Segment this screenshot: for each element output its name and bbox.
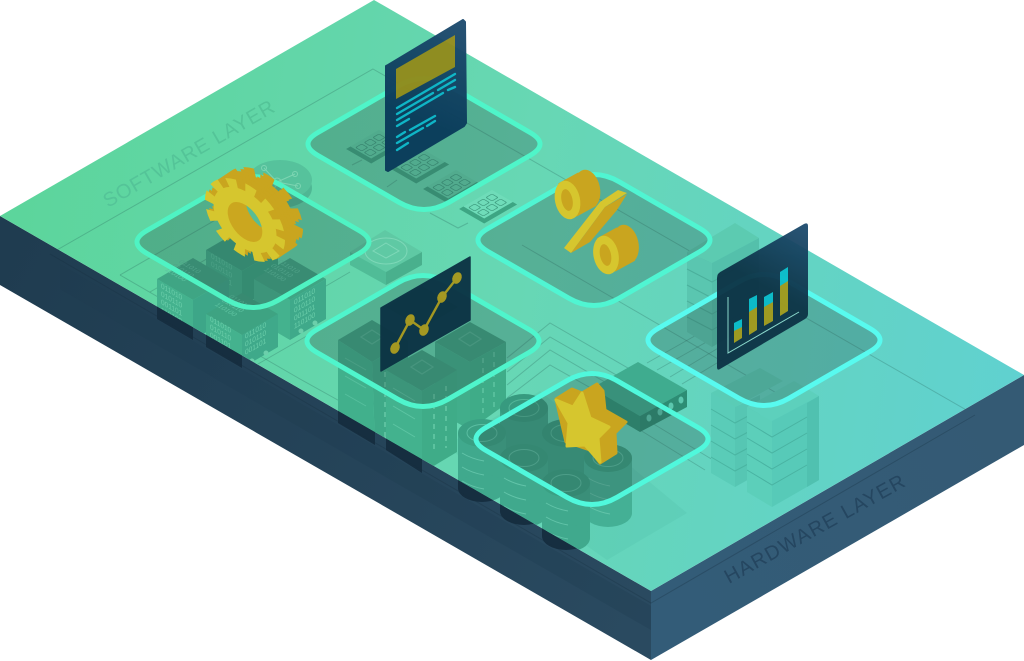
- software layer objects: [248, 130, 517, 285]
- backup folder tile: [350, 230, 422, 285]
- cube: right: 110100: [261, 267, 287, 282]
- icon: percent symbol: [551, 167, 642, 277]
- cube: right: 011010: [294, 286, 315, 307]
- plate: gear: [137, 176, 369, 308]
- cube: left: 001101: [161, 297, 182, 318]
- hardware layer objects: [58, 68, 966, 550]
- bars: [734, 267, 788, 343]
- heading: SOFTWARE LAYER: SOFTWARE LAYER: [100, 96, 279, 212]
- floor tile tint: [445, 391, 687, 560]
- cube: right: 010110: [294, 294, 315, 315]
- chart trend line: [388, 271, 464, 355]
- cube: front: 011010: [210, 314, 231, 335]
- cube: back: 010110: [211, 259, 232, 280]
- percent lower ring: [590, 222, 642, 277]
- plate: star: [476, 374, 708, 504]
- cube: front: [206, 293, 278, 368]
- cube: front: 011010: [226, 294, 252, 309]
- connector box: [592, 362, 687, 432]
- slab side: right blue face: [651, 375, 1024, 660]
- cube: right: 011010: [275, 259, 301, 274]
- server towers under the line chart: [338, 320, 506, 466]
- hardware object undersides showing below the plate edge: [157, 280, 590, 550]
- icon: line chart board: [381, 257, 470, 371]
- tower: front: [385, 350, 457, 473]
- right server tower: upper: [687, 223, 759, 347]
- cube: right: 110100: [294, 310, 315, 331]
- icon: gear: [210, 159, 298, 270]
- percent upper ring: [551, 167, 604, 222]
- disk stack e: [542, 469, 590, 552]
- glowing plates: [137, 78, 880, 504]
- cube: back: [206, 238, 278, 300]
- cube: back: 001101: [211, 267, 232, 288]
- right server tower: front: [747, 381, 819, 507]
- keypad module 3: [423, 170, 481, 204]
- cube: front: 001101: [210, 330, 231, 351]
- plate: percent: [478, 174, 710, 306]
- plate: line chart: [307, 276, 539, 406]
- disk stacks: [458, 394, 632, 552]
- icon: bar chart board: [717, 223, 808, 370]
- plate: bar chart: [648, 274, 880, 406]
- dark band on left face: [60, 264, 651, 630]
- hardware inset line: [50, 254, 975, 603]
- cube: right: 001101: [294, 302, 315, 323]
- cube: front: 110100: [212, 302, 238, 317]
- tower: left: [338, 320, 408, 445]
- connectivity node: [248, 160, 312, 208]
- data storage cubes: [157, 238, 326, 362]
- tower: back: [386, 286, 458, 328]
- cube: front: 010110: [219, 298, 245, 313]
- cube: front: 001101: [245, 336, 266, 357]
- disk stack b: [500, 394, 548, 449]
- cube: left: [157, 258, 229, 340]
- cube: left: 011010: [161, 281, 182, 302]
- disk stack c: [500, 449, 542, 525]
- cube: back: 011010: [211, 251, 232, 272]
- keypad module 1: [346, 130, 404, 164]
- disk stack f: [584, 444, 632, 527]
- keypad module 2: [391, 150, 449, 184]
- icon: star: [556, 384, 626, 463]
- circuit lines: [58, 68, 966, 470]
- cube: left: 010110: [169, 263, 195, 278]
- document image block: [396, 35, 455, 99]
- cube: left: 010110: [161, 289, 182, 310]
- heading: HARDWARE LAYER: HARDWARE LAYER: [721, 471, 909, 588]
- disk stack d: [548, 420, 588, 474]
- cube: right: 010110: [268, 263, 294, 278]
- plate: document: [308, 78, 540, 210]
- percent slash: [564, 190, 627, 253]
- disk stack a: [458, 419, 500, 500]
- cube: left: 110100: [161, 305, 182, 326]
- cube: left: 011010: [176, 259, 202, 274]
- bar chart axes: [728, 297, 799, 353]
- cube: front: 010110: [210, 322, 231, 343]
- right server tower: middle: [711, 368, 783, 487]
- cube: front: 010110: [245, 328, 266, 349]
- icon: document: [386, 20, 466, 171]
- cube: left: 110100: [162, 267, 188, 282]
- slab side: left dark face: [0, 216, 651, 660]
- document text lines: [397, 74, 455, 150]
- cube: right: [254, 258, 326, 340]
- tower: back right: [435, 322, 506, 430]
- cube: front: 011010: [245, 320, 266, 341]
- keypad module 4: [459, 190, 517, 224]
